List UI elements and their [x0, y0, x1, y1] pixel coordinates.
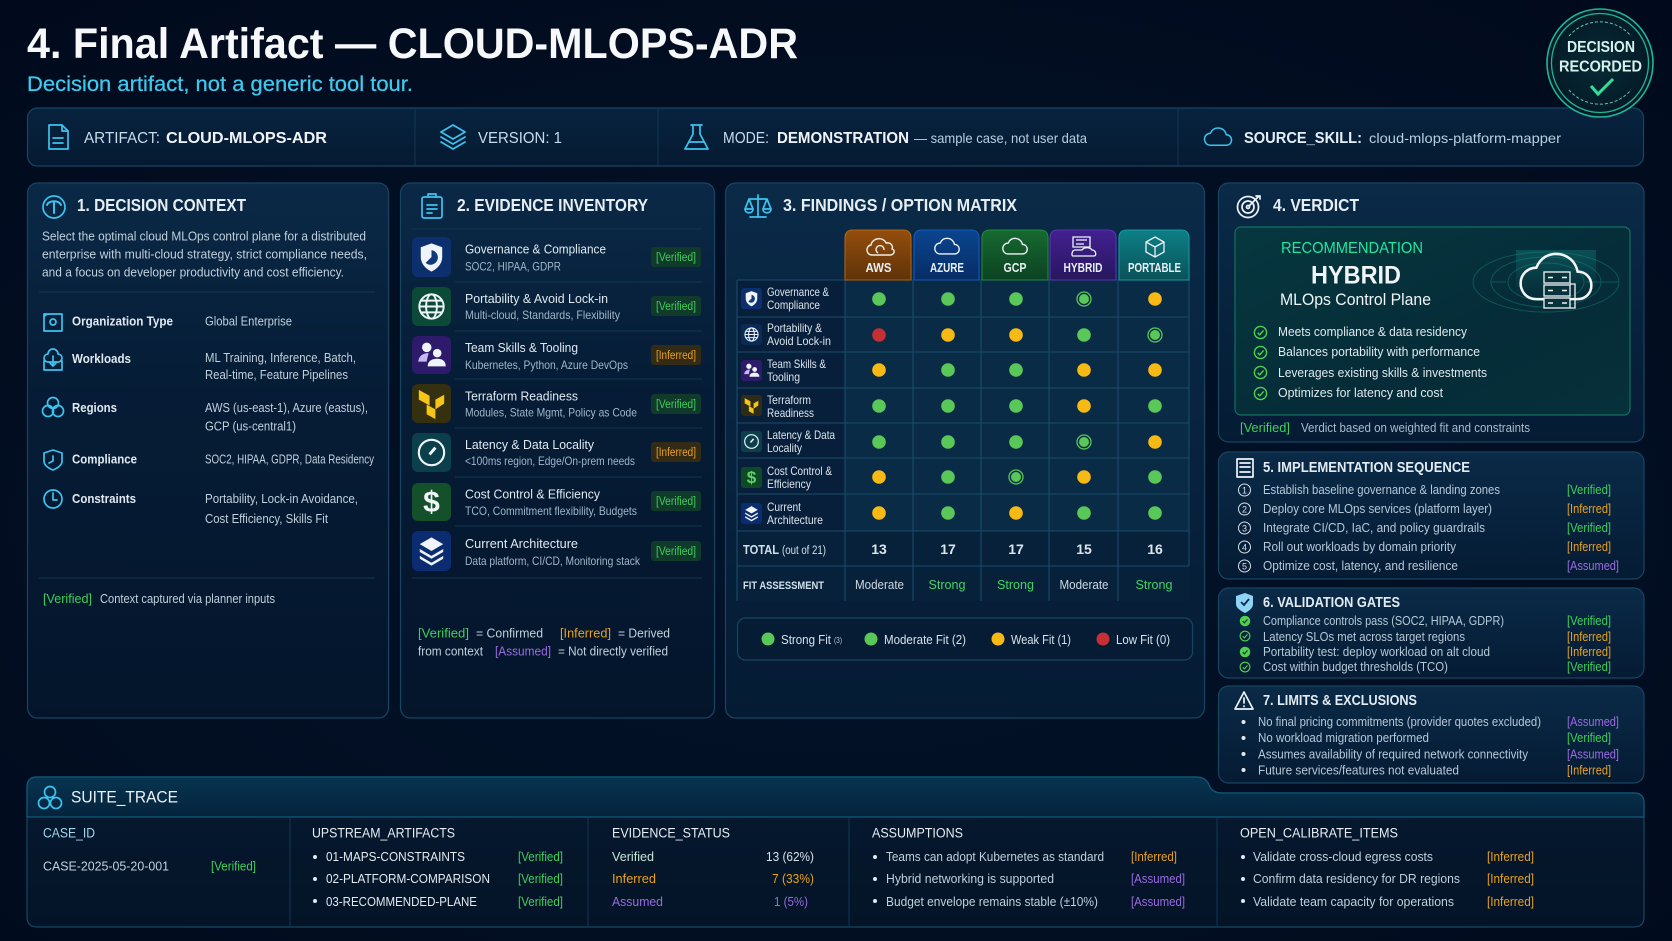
- subtitle: Decision artifact, not a generic tool tour.: [27, 73, 413, 96]
- step 1: Establish baseline governance & landing zones: [1263, 482, 1500, 497]
- evidence: cost control: [412, 483, 701, 521]
- column: assumptions: ASSUMPTIONS: [872, 826, 963, 840]
- row: latency & data locality: Latency & Data: [767, 428, 835, 442]
- step 3: Integrate CI/CD, IaC, and policy guardrails: [1263, 520, 1485, 535]
- row: compliance: [44, 450, 374, 470]
- recommendation reasons: Leverages existing skills & investments: [1278, 365, 1487, 380]
- matrix table: [737, 230, 1189, 601]
- row: fit assessment: Moderate: [855, 577, 904, 592]
- icon: layers: [441, 125, 465, 149]
- column: open calibrate items: Validate team capacity for operations: [1253, 894, 1454, 909]
- evidence: governance: [412, 237, 701, 277]
- column: open calibrate items: Validate cross-cloud egress costs: [1253, 849, 1433, 864]
- artifact field: [84, 130, 327, 147]
- row: compliance: SOC2, HIPAA, GDPR, Data Residency: [205, 452, 374, 466]
- row: workloads: Real-time, Feature Pipelines: [205, 367, 348, 382]
- heading: 1. DECISION CONTEXT: [77, 195, 246, 215]
- evidence legend: = Derived: [618, 626, 670, 640]
- column: HYBRID: [1050, 230, 1116, 280]
- step 5: Optimize cost, latency, and resilience: [1263, 558, 1458, 573]
- gate 4: [1240, 659, 1611, 674]
- column: case id: CASE-2025-05-20-001: [43, 858, 169, 874]
- row: latency & data locality: [741, 428, 1162, 455]
- row: regions: GCP (us-central1): [205, 418, 296, 434]
- evidence: governance: Governance & Compliance: [465, 242, 606, 256]
- column: assumptions: Teams can adopt Kubernetes as standard: [886, 849, 1104, 864]
- column: PORTABLE: PORTABLE: [1128, 261, 1181, 275]
- heading: 7. LIMITS & EXCLUSIONS: [1263, 692, 1417, 709]
- column: open calibrate items: OPEN_CALIBRATE_ITEMS: [1240, 826, 1398, 840]
- artifact field: ARTIFACT:: [84, 130, 160, 147]
- row: portability & avoid lock-in: Avoid Lock-in: [767, 334, 831, 348]
- row: fit assessment: Strong: [997, 577, 1034, 592]
- row: constraints: Constraints: [72, 491, 136, 506]
- column: evidence status: [612, 826, 814, 909]
- fit legend: (3): [834, 636, 842, 645]
- icon: target: [1238, 196, 1260, 218]
- column: open calibrate items: [Inferred]: [1487, 850, 1534, 864]
- row: totals: 17: [940, 541, 956, 557]
- column: assumptions: Budget envelope remains stable (±10%): [886, 894, 1098, 909]
- column: evidence status: 13 (62%): [766, 849, 814, 864]
- evidence legend: [418, 626, 670, 658]
- row: compliance: Compliance: [72, 452, 137, 466]
- row: totals: [743, 541, 1163, 557]
- row: team skills & tooling: [741, 357, 1162, 384]
- context paragraph: enterprise with multi-cloud strategy, strict compliance needs,: [42, 246, 367, 262]
- step 3: [1238, 520, 1611, 535]
- column: AZURE: AZURE: [930, 261, 964, 275]
- column: open calibrate items: [1240, 826, 1534, 909]
- icon: suite trace: [38, 786, 62, 808]
- row: fit assessment: FIT ASSESSMENT: [743, 580, 824, 592]
- evidence legend: [Verified]: [418, 626, 469, 640]
- row: current architecture: Current: [767, 500, 802, 514]
- evidence: portability: [412, 287, 701, 326]
- context footer: [43, 591, 275, 606]
- column: GCP: GCP: [1004, 261, 1026, 275]
- evidence: current architecture: Current Architecture: [465, 536, 578, 551]
- column: case id: CASE_ID: [43, 826, 95, 840]
- context paragraph: and a focus on developer productivity and cost efficiency.: [42, 264, 344, 280]
- gate 1: [Verified]: [1567, 614, 1611, 628]
- evidence: current architecture: Data platform, CI/CD, Monitoring stack: [465, 554, 641, 568]
- heading: 4. VERDICT: [1273, 195, 1359, 215]
- column: open calibrate items: Confirm data residency for DR regions: [1253, 871, 1460, 886]
- icon: context: [43, 196, 65, 218]
- column: evidence status: Verified: [612, 849, 654, 864]
- recommendation reasons: Optimizes for latency and cost: [1278, 385, 1443, 400]
- artifact field: CLOUD-MLOPS-ADR: [166, 130, 327, 147]
- panel: 4. verdict: [1218, 183, 1644, 442]
- context footer: Context captured via planner inputs: [100, 591, 275, 606]
- evidence legend: [Assumed]: [495, 644, 551, 658]
- fit legend: Low Fit (0): [1116, 632, 1170, 647]
- evidence: team skills: Kubernetes, Python, Azure DevOps: [465, 358, 628, 372]
- limit 3: [Assumed]: [1567, 748, 1619, 762]
- column: upstream artifacts: UPSTREAM_ARTIFACTS: [312, 826, 455, 840]
- evidence: governance: [Verified]: [656, 252, 696, 264]
- context footer: [Verified]: [43, 592, 92, 606]
- row: fit assessment: Strong: [1136, 577, 1172, 592]
- row: fit assessment: Moderate: [1060, 577, 1108, 592]
- column: AWS: [845, 230, 911, 280]
- column: assumptions: Hybrid networking is supported: [886, 871, 1054, 886]
- limit 4: [1242, 762, 1611, 778]
- evidence: team skills: [Inferred]: [656, 350, 696, 362]
- row: fit assessment: Strong: [928, 577, 966, 592]
- gate 2: Latency SLOs met across target regions: [1263, 629, 1465, 644]
- recommendation reasons: Balances portability with performance: [1278, 344, 1480, 359]
- source skill field: SOURCE_SKILL:: [1244, 130, 1362, 147]
- row: cost control & efficiency: $: [747, 468, 757, 487]
- recommendation text: RECOMMENDATION: [1281, 240, 1423, 257]
- panel: 2. evidence inventory: [400, 183, 714, 718]
- heading: 6. VALIDATION GATES: [1263, 594, 1400, 611]
- evidence: portability: Portability & Avoid Lock-in: [465, 291, 608, 306]
- context paragraph: Select the optimal cloud MLOps control plane for a distributed: [42, 228, 366, 244]
- row: latency & data locality: Locality: [767, 441, 802, 455]
- step 2: [Inferred]: [1567, 502, 1611, 516]
- icon: shield check: [1236, 593, 1253, 613]
- row: portability & avoid lock-in: Portability &: [767, 321, 822, 335]
- step 2: 2: [1242, 504, 1247, 514]
- row: totals: 17: [1008, 541, 1024, 557]
- recommendation text: [1280, 240, 1431, 309]
- column: assumptions: [Assumed]: [1131, 895, 1185, 909]
- step 5: 5: [1242, 562, 1247, 572]
- step 2: [1238, 501, 1611, 516]
- row: fit assessment: [743, 577, 1172, 592]
- column: upstream artifacts: 02-PLATFORM-COMPARISON: [326, 871, 490, 886]
- column: upstream artifacts: 01-MAPS-CONSTRAINTS: [326, 849, 465, 864]
- evidence: latency: [Inferred]: [656, 447, 696, 459]
- step 2: Deploy core MLOps services (platform layer): [1263, 501, 1492, 516]
- limit 1: [Assumed]: [1567, 715, 1619, 729]
- row: organization type: [44, 314, 292, 331]
- title: 4. Final Artifact — CLOUD-MLOPS-ADR: [27, 20, 798, 68]
- panel: 3. findings / option matrix: [726, 183, 1204, 718]
- row: organization type: Global Enterprise: [205, 314, 292, 328]
- row: workloads: ML Training, Inference, Batch,: [205, 350, 356, 365]
- fit legend: Strong Fit: [781, 632, 831, 647]
- column: upstream artifacts: [312, 826, 563, 909]
- step 4: Roll out workloads by domain priority: [1263, 539, 1456, 554]
- recommendation text: HYBRID: [1311, 262, 1401, 290]
- fit legend: Moderate Fit (2): [884, 632, 966, 647]
- gate 4: Cost within budget thresholds (TCO): [1263, 659, 1448, 674]
- limit 1: No final pricing commitments (provider quotes excluded): [1258, 714, 1541, 729]
- row: constraints: Cost Efficiency, Skills Fit: [205, 511, 328, 526]
- column: AZURE: [914, 230, 979, 280]
- row: governance & compliance: Compliance: [767, 298, 820, 312]
- panel: 5. implementation sequence: [1218, 452, 1644, 579]
- icon: clipboard: [422, 194, 442, 218]
- column: assumptions: [Assumed]: [1131, 872, 1185, 886]
- illustration: hybrid cloud server: [1473, 250, 1619, 312]
- step 3: 3: [1242, 524, 1247, 534]
- source skill field: [1244, 130, 1561, 147]
- step 1: 1: [1242, 486, 1247, 496]
- column: GCP: [982, 230, 1048, 280]
- column: AWS: AWS: [866, 261, 892, 275]
- row: workloads: [44, 349, 356, 382]
- evidence: terraform: Modules, State Mgmt, Policy as Code: [465, 406, 637, 420]
- stamp: decision recorded: RECORDED: [1559, 58, 1642, 76]
- mode field: — sample case, not user data: [914, 130, 1087, 146]
- column: upstream artifacts: [Verified]: [518, 850, 563, 864]
- evidence: cost control: [Verified]: [656, 496, 696, 508]
- verdict footer: Verdict based on weighted fit and constraints: [1301, 420, 1530, 435]
- mode field: [723, 130, 1087, 147]
- evidence: latency: <100ms region, Edge/On-prem needs: [465, 454, 635, 468]
- fit legend: Weak Fit (1): [1011, 632, 1071, 647]
- evidence legend: = Confirmed: [476, 626, 543, 640]
- column: case id: [43, 826, 256, 874]
- row: current architecture: [741, 500, 1162, 527]
- gate 2: [Inferred]: [1567, 630, 1611, 644]
- evidence: team skills: [412, 336, 701, 374]
- evidence: cost control: $: [423, 486, 440, 519]
- evidence: cost control: Cost Control & Efficiency: [465, 486, 600, 502]
- limit 4: Future services/features not evaluated: [1258, 762, 1459, 778]
- step 4: 4: [1242, 542, 1247, 552]
- column: upstream artifacts: 03-RECOMMENDED-PLANE: [326, 894, 477, 909]
- heading: 5. IMPLEMENTATION SEQUENCE: [1263, 459, 1470, 476]
- icon: flask: [685, 125, 708, 149]
- row: totals: 16: [1147, 541, 1163, 557]
- mode field: MODE:: [723, 130, 769, 147]
- gate 3: Portability test: deploy workload on alt cloud: [1263, 644, 1490, 659]
- row: terraform readiness: [741, 393, 1162, 420]
- recommendation reasons: Meets compliance & data residency: [1278, 324, 1467, 339]
- icon: cloud: [1204, 128, 1232, 145]
- context paragraph: [42, 228, 367, 280]
- limit 2: No workload migration performed: [1258, 730, 1429, 745]
- column: assumptions: [Inferred]: [1131, 850, 1177, 864]
- row: constraints: [44, 490, 358, 526]
- source skill field: cloud-mlops-platform-mapper: [1369, 130, 1561, 146]
- stamp: decision recorded: [1547, 9, 1653, 117]
- column: assumptions: [872, 826, 1185, 909]
- stamp: decision recorded: DECISION: [1567, 39, 1635, 56]
- gate 1: Compliance controls pass (SOC2, HIPAA, GDPR): [1263, 613, 1504, 628]
- row: governance & compliance: Governance &: [767, 285, 829, 299]
- panel: 6. validation gates: [1218, 588, 1644, 678]
- limit 2: [1242, 730, 1611, 745]
- metadata bar: [28, 108, 1644, 166]
- gate 3: [Inferred]: [1567, 645, 1611, 659]
- column: open calibrate items: [Inferred]: [1487, 872, 1534, 886]
- step 5: [Assumed]: [1567, 559, 1619, 573]
- evidence: latency: Latency & Data Locality: [465, 437, 594, 452]
- column: evidence status: 7 (33%): [772, 871, 814, 886]
- limit 4: [Inferred]: [1567, 764, 1611, 778]
- heading: SUITE_TRACE: [71, 788, 178, 806]
- row: terraform readiness: Readiness: [767, 406, 814, 420]
- step 5: [1238, 558, 1619, 573]
- verdict footer: [Verified]: [1240, 420, 1290, 435]
- step 1: [Verified]: [1567, 483, 1611, 497]
- row: totals: 15: [1076, 541, 1092, 557]
- recommendation reasons: [1254, 324, 1487, 400]
- icon: scales: [745, 195, 771, 217]
- evidence: current architecture: [Verified]: [656, 546, 696, 558]
- panel: suite trace: [27, 777, 1644, 927]
- icon: document: [49, 125, 68, 149]
- evidence: cost control: TCO, Commitment flexibility, Budgets: [465, 504, 637, 518]
- row: cost control & efficiency: Cost Control &: [767, 464, 832, 478]
- column: evidence status: 1 (5%): [774, 894, 808, 909]
- column: HYBRID: HYBRID: [1064, 261, 1102, 275]
- gate 2: [1240, 629, 1611, 644]
- step 4: [1238, 539, 1611, 554]
- evidence: portability: [Verified]: [656, 301, 696, 313]
- column: upstream artifacts: [Verified]: [518, 895, 563, 909]
- evidence legend: = Not directly verified: [558, 644, 668, 658]
- recommendation text: MLOps Control Plane: [1280, 291, 1431, 309]
- evidence: governance: SOC2, HIPAA, GDPR: [465, 260, 561, 274]
- limit 3: Assumes availability of required network connectivity: [1258, 746, 1528, 762]
- evidence: latency: [412, 433, 701, 472]
- column: evidence status: Assumed: [612, 894, 663, 909]
- row: regions: AWS (us-east-1), Azure (eastus),: [205, 400, 368, 415]
- column: evidence status: EVIDENCE_STATUS: [612, 826, 730, 840]
- heading: 2. EVIDENCE INVENTORY: [457, 195, 648, 215]
- icon: checklist: [1237, 459, 1253, 477]
- icon: warning: [1235, 692, 1253, 709]
- column: evidence status: Inferred: [612, 871, 656, 886]
- row: team skills & tooling: Team Skills &: [767, 357, 826, 371]
- panel: 7. limits & exclusions: [1218, 686, 1644, 783]
- row: team skills & tooling: Tooling: [767, 370, 800, 384]
- row: portability & avoid lock-in: [741, 321, 1162, 348]
- evidence legend: from context: [418, 644, 483, 658]
- evidence: terraform: [Verified]: [656, 399, 696, 411]
- row: governance & compliance: [741, 285, 1162, 312]
- column: case id: [Verified]: [211, 860, 256, 874]
- version field: VERSION: 1: [478, 130, 562, 147]
- row: workloads: Workloads: [72, 351, 131, 366]
- row: terraform readiness: Terraform: [767, 393, 811, 407]
- mode field: DEMONSTRATION: [777, 130, 909, 147]
- column: open calibrate items: [Inferred]: [1487, 895, 1534, 909]
- row: constraints: Portability, Lock-in Avoidance,: [205, 491, 358, 506]
- limit 2: [Verified]: [1567, 731, 1611, 745]
- row: cost control & efficiency: [741, 464, 1162, 491]
- row: organization type: Organization Type: [72, 314, 173, 328]
- evidence: terraform: Terraform Readiness: [465, 388, 578, 404]
- row: current architecture: Architecture: [767, 513, 823, 527]
- step 3: [Verified]: [1567, 521, 1611, 535]
- row: regions: [42, 398, 368, 434]
- heading: 3. FINDINGS / OPTION MATRIX: [783, 195, 1017, 215]
- fit legend: [738, 618, 1192, 660]
- column: upstream artifacts: [Verified]: [518, 872, 563, 886]
- evidence: team skills: Team Skills & Tooling: [465, 340, 578, 355]
- row: totals: 13: [871, 541, 887, 557]
- evidence: current architecture: [412, 531, 701, 571]
- gate 4: [Verified]: [1567, 660, 1611, 674]
- step 4: [Inferred]: [1567, 540, 1611, 554]
- gate 3: [1240, 644, 1611, 659]
- evidence legend: [Inferred]: [560, 626, 611, 640]
- column: PORTABLE: [1119, 230, 1189, 280]
- row: totals: (out of 21): [782, 545, 826, 557]
- row: totals: TOTAL: [743, 542, 779, 557]
- row: cost control & efficiency: Efficiency: [767, 477, 811, 491]
- evidence: portability: Multi-cloud, Standards, Flexibility: [465, 308, 620, 322]
- recommendation card: [1235, 227, 1630, 415]
- evidence: terraform: [412, 384, 701, 423]
- panel: 1. decision context: [28, 183, 388, 718]
- row: regions: Regions: [72, 400, 117, 415]
